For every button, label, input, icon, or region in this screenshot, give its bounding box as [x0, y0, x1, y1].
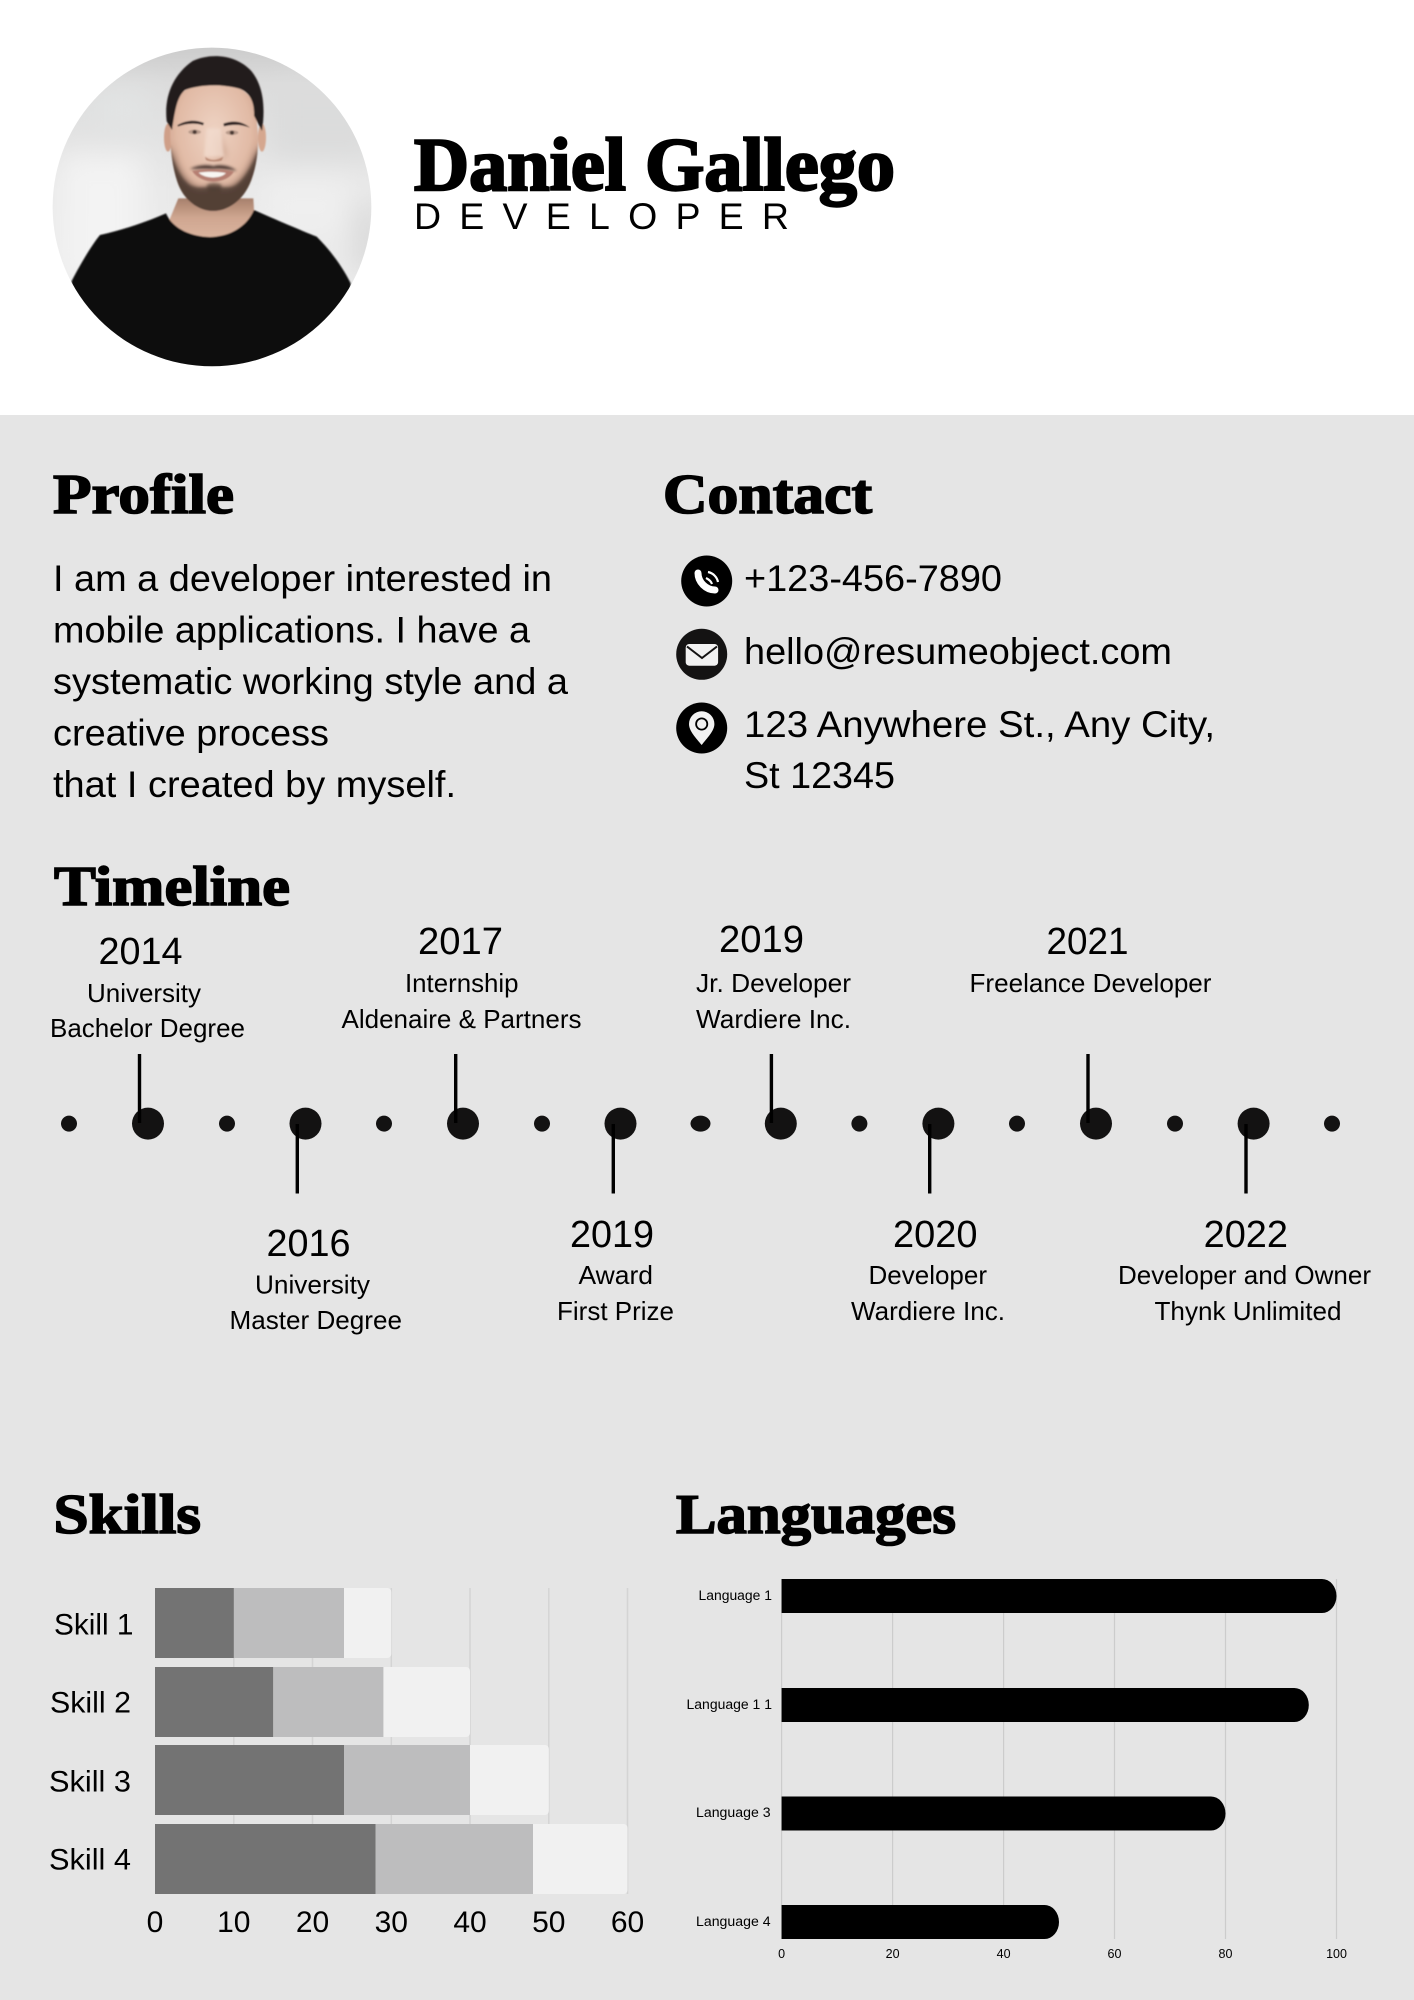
profile text: creative process: [53, 712, 329, 754]
event: 2019 award: 2019: [570, 1214, 654, 1256]
job title: DEVELOPER: [414, 195, 789, 237]
skills axis labels: 50: [532, 1906, 565, 1939]
contact address: [744, 704, 1215, 796]
event: 2019 award: Award: [578, 1260, 653, 1290]
skill labels: Skill 2: [50, 1686, 131, 1720]
event: 2022: 2022: [1204, 1214, 1288, 1256]
event: 2017: 2017: [418, 921, 503, 963]
profile text: systematic working style and a: [53, 661, 568, 702]
event: 2014: 2014: [98, 931, 182, 973]
languages axis labels: 0: [778, 1947, 785, 1961]
skill labels: Skill 4: [49, 1844, 131, 1876]
heading: contact: Contact: [663, 464, 872, 526]
event: 2022: Developer and Owner: [1118, 1260, 1371, 1290]
profile text: [53, 558, 568, 805]
event: 2021: Freelance Developer: [970, 968, 1212, 998]
event: 2019 award: [557, 1214, 674, 1326]
event: 2020: Wardiere Inc.: [851, 1296, 1005, 1326]
icon: location pin: [676, 702, 727, 754]
section: skills: [49, 1484, 644, 1939]
languages axis labels: 80: [1219, 1947, 1232, 1961]
section: contact: [663, 464, 1215, 796]
section: profile: [53, 464, 568, 805]
bar: language 1 1: [782, 1688, 1309, 1722]
languages bar chart: [686, 1579, 1347, 1961]
event: 2016: Master Degree: [230, 1305, 402, 1335]
grey content panel: [0, 415, 1414, 2000]
event: 2014: University: [87, 978, 201, 1008]
event: 2020: 2020: [893, 1214, 978, 1256]
bar: skill 2: [155, 1667, 470, 1737]
skill labels: [49, 1608, 134, 1876]
language labels: Language 1 1: [686, 1697, 772, 1712]
section: timeline: [50, 856, 1371, 1335]
event: 2019 award: First Prize: [557, 1296, 674, 1326]
section: languages: [676, 1484, 1347, 1961]
timeline dots: [61, 1108, 1340, 1140]
icon: phone: [681, 556, 732, 606]
event: 2017: Internship: [405, 968, 518, 998]
skill labels: Skill 1: [54, 1608, 134, 1642]
contact email: hello@resumeobject.com: [744, 631, 1172, 672]
profile text: I am a developer interested in: [53, 558, 552, 599]
contact address: St 12345: [744, 755, 895, 796]
bar: skill 3: [155, 1745, 549, 1815]
skills axis labels: 0: [147, 1906, 163, 1939]
event: 2017: [342, 921, 582, 1034]
bar: skill 4: [155, 1824, 628, 1894]
event: 2019 junior developer: Wardiere Inc.: [696, 1004, 851, 1034]
heading: profile: Profile: [53, 464, 234, 526]
event: 2016: University: [255, 1270, 370, 1300]
profile text: that I created by myself.: [53, 764, 456, 805]
event: 2014: [50, 931, 245, 1043]
event: 2014: Bachelor Degree: [50, 1013, 245, 1043]
language labels: [686, 1588, 772, 1929]
skills axis labels: 10: [217, 1906, 250, 1939]
portrait photo: [50, 45, 378, 372]
event: 2022: [1118, 1214, 1371, 1326]
event: 2019 junior developer: Jr. Developer: [696, 968, 851, 998]
event: 2016: [230, 1223, 402, 1335]
event: 2022: Thynk Unlimited: [1154, 1296, 1342, 1326]
languages axis labels: 100: [1326, 1947, 1347, 1961]
language labels: Language 3: [696, 1805, 771, 1820]
skill labels: Skill 3: [49, 1766, 131, 1798]
heading: skills: Skills: [54, 1484, 201, 1546]
profile text: mobile applications. I have a: [53, 610, 530, 650]
heading: timeline: Timeline: [54, 856, 290, 918]
heading: languages: Languages: [676, 1484, 956, 1546]
event: 2019 junior developer: 2019: [719, 919, 804, 961]
event: 2020: Developer: [868, 1260, 987, 1290]
contact address: 123 Anywhere St., Any City,: [744, 704, 1215, 745]
timeline connector lines: [138, 1054, 1248, 1194]
bar: language 4: [782, 1905, 1059, 1939]
languages axis labels: [778, 1947, 1347, 1961]
event: 2021: 2021: [1046, 921, 1128, 963]
language labels: Language 1: [698, 1588, 772, 1603]
skills axis labels: 20: [296, 1906, 329, 1939]
language labels: Language 4: [696, 1914, 771, 1929]
contact phone: +123-456-7890: [744, 558, 1002, 599]
languages axis labels: 40: [997, 1947, 1011, 1961]
skills stacked bar chart: [49, 1588, 644, 1939]
name: Daniel Gallego: [414, 124, 895, 207]
event: 2019 junior developer: [696, 919, 851, 1034]
skills axis labels: [147, 1906, 644, 1939]
icon: mail: [676, 629, 727, 680]
skills axis labels: 40: [453, 1906, 487, 1939]
bar: language 1: [782, 1579, 1336, 1613]
bar: skill 1: [155, 1588, 391, 1658]
bar: language 3: [782, 1796, 1226, 1830]
event: 2020: [851, 1214, 1005, 1326]
languages axis labels: 20: [886, 1947, 900, 1961]
languages axis labels: 60: [1108, 1947, 1121, 1961]
event: 2016: 2016: [266, 1223, 350, 1265]
event: 2021: [970, 921, 1212, 998]
skills axis labels: 30: [375, 1906, 408, 1939]
skills axis labels: 60: [611, 1906, 644, 1939]
event: 2017: Aldenaire & Partners: [342, 1004, 582, 1034]
